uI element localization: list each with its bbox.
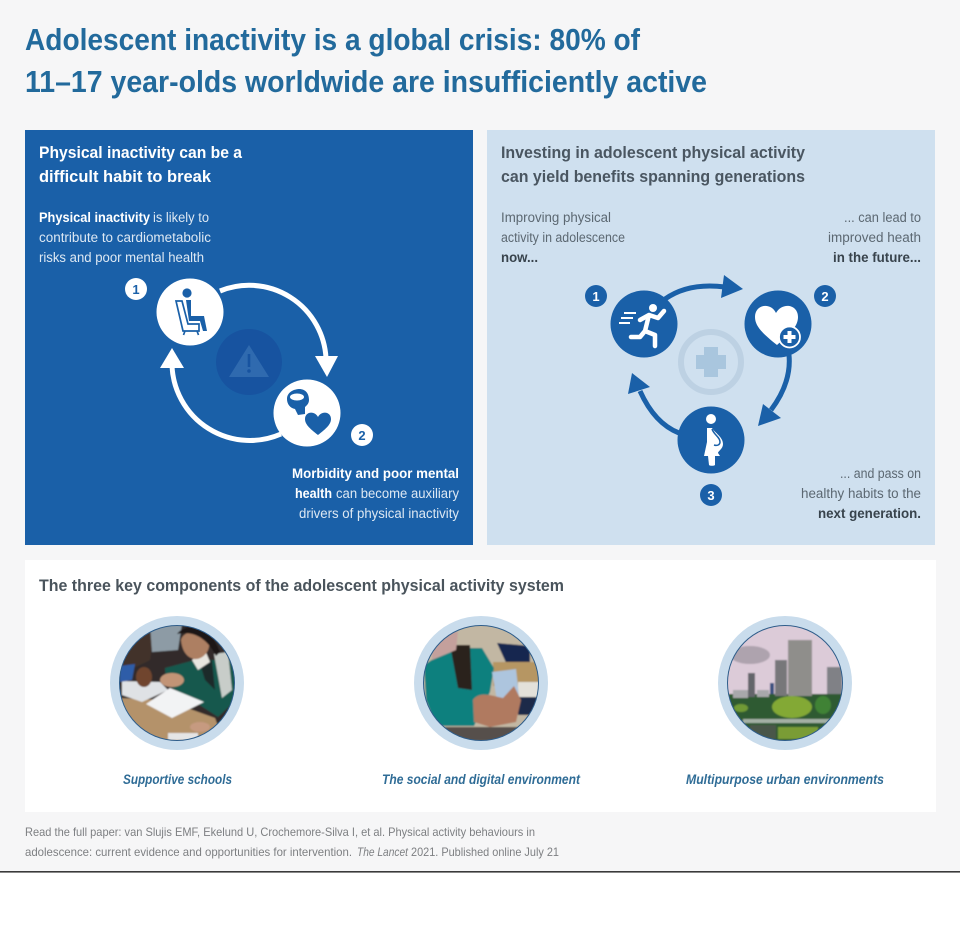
badge: 1: 1: [592, 289, 600, 304]
panel: three key components: [25, 560, 936, 812]
text block: next generation: ... and pass on: [840, 466, 921, 481]
panel heading: benefits spanning generations: Investing in adolescent physical activity: [501, 143, 806, 162]
arrow: morbidity to inactivity: [160, 348, 281, 440]
section heading: The three key components of the adolescent physical activity system: [39, 576, 564, 595]
badge: 2: [351, 424, 373, 446]
text block: inactivity risks: [39, 210, 211, 265]
footer citation: The Lancet: [357, 845, 409, 859]
panel heading: difficult habit: [39, 143, 242, 186]
icon: runner: [610, 290, 678, 358]
panel heading: benefits spanning generations: can yield benefits spanning generations: [501, 167, 805, 186]
text block: improving now: [501, 210, 625, 265]
text block: inactivity risks: is likely to: [153, 210, 209, 225]
footer citation: [25, 825, 559, 859]
arrow: health to next generation: [758, 355, 789, 426]
photo: social and digital: [414, 616, 548, 750]
panel: physical inactivity habit: [25, 130, 473, 545]
text block: future health: ... can lead to: [844, 210, 921, 225]
panel heading: difficult habit: difficult habit to break: [39, 167, 212, 186]
badge: 3: [700, 484, 722, 506]
footer citation: 2021. Published online July 21: [411, 845, 559, 859]
icon: mind and heart: [274, 380, 340, 446]
photo: supportive schools: [110, 616, 244, 750]
text block: next generation: next generation.: [818, 506, 921, 521]
text block: improving now: Improving physical: [501, 210, 611, 225]
caption: social and digital: The social and digital environment: [382, 772, 580, 787]
badge: 2: 2: [358, 428, 366, 443]
text block: future health: [828, 210, 921, 265]
title: 11–17 year-olds worldwide are insufficiently active: [25, 64, 707, 99]
caption: supportive schools: Supportive schools: [123, 772, 232, 787]
badge: 1: [585, 285, 607, 307]
text block: morbidity drivers: health: [295, 486, 332, 501]
caption: urban environments: Multipurpose urban environments: [686, 772, 884, 787]
badge: 2: 2: [821, 289, 829, 304]
title: Adolescent inactivity is a global crisis: 80% of: [25, 22, 641, 57]
footer citation: adolescence: current evidence and opportunities for intervention.: [25, 845, 352, 859]
photo: urban environments: [718, 616, 852, 750]
text block: next generation: [801, 466, 921, 521]
text block: next generation: healthy habits to the: [801, 486, 921, 501]
badge: 2: [814, 285, 836, 307]
text block: future health: in the future...: [833, 250, 921, 265]
panel heading: difficult habit: Physical inactivity can be a: [39, 143, 242, 162]
text block: inactivity risks: contribute to cardiometabolic: [39, 230, 211, 245]
title: [25, 22, 707, 99]
arrow: activity to health: [665, 275, 743, 299]
icon: central plus: [681, 332, 741, 392]
text block: future health: improved heath: [828, 230, 921, 245]
icon: pregnant person: [678, 406, 744, 474]
panel: investing benefits: [487, 130, 935, 545]
badge: 1: 1: [132, 282, 140, 297]
arrow: inactivity to morbidity: [220, 285, 338, 377]
icon: warning circle: [216, 329, 282, 395]
text block: morbidity drivers: [292, 466, 459, 521]
arrow: next generation to activity: [628, 373, 679, 433]
badge: 1: [125, 278, 147, 300]
text block: morbidity drivers: can become auxiliary: [336, 486, 459, 501]
footer citation: Read the full paper: van Slujis EMF, Ekelund U, Crochemore-Silva I, et al. Physical activity behaviours in: [25, 825, 535, 839]
icon: seated person: [156, 278, 224, 346]
text block: morbidity drivers: drivers of physical inactivity: [299, 506, 459, 521]
icon: heart plus: [744, 290, 812, 358]
text block: inactivity risks: risks and poor mental health: [39, 250, 204, 265]
text block: improving now: now...: [501, 250, 538, 265]
panel heading: benefits spanning generations: [501, 143, 806, 186]
text block: inactivity risks: Physical inactivity: [39, 210, 150, 225]
text block: morbidity drivers: Morbidity and poor mental: [292, 466, 459, 481]
badge: 3: 3: [707, 488, 715, 503]
text block: improving now: activity in adolescence: [501, 230, 625, 245]
